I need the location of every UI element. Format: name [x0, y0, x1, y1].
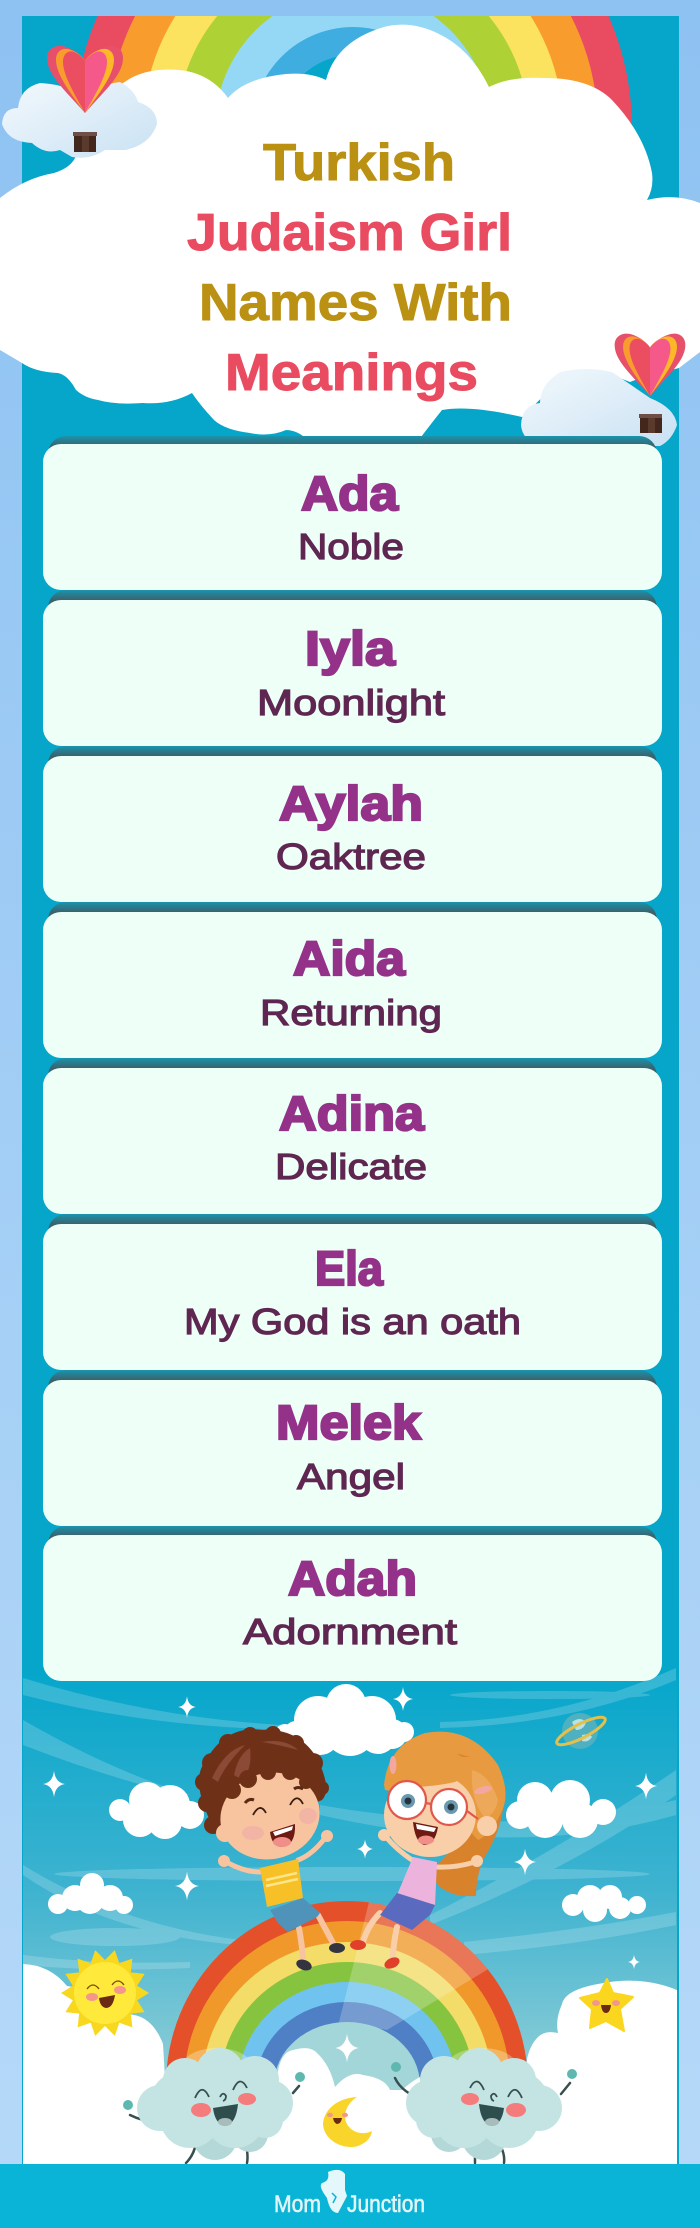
card: Melek: Melek [276, 1397, 421, 1450]
right small cloud [521, 369, 677, 446]
boy shirt [260, 1859, 303, 1907]
card: Aylah [43, 746, 662, 902]
girl eyes [401, 1794, 458, 1814]
card: Adina: Delicate [275, 1146, 427, 1187]
arch sparkle [335, 2034, 359, 2062]
cloud body [137, 2048, 293, 2160]
footer bar [0, 2164, 700, 2228]
card: Ada: Noble [298, 526, 404, 567]
sky [23, 1670, 677, 2165]
girl skirt [380, 1893, 435, 1930]
card: Melek: Angel [297, 1456, 405, 1497]
title: Names With [199, 274, 512, 332]
card: Ada: Ada [301, 468, 398, 521]
left balloon [47, 46, 123, 152]
boy hair highlights [212, 1741, 298, 1782]
title [187, 134, 512, 402]
card: Adah: Adah [288, 1553, 417, 1606]
sky streaks [23, 1668, 676, 1969]
girl shoes [350, 1940, 401, 1971]
right cloud character [391, 2048, 577, 2163]
card: Adina [43, 1058, 662, 1214]
card: Aida: Aida [293, 933, 405, 986]
left cloud face [191, 2081, 256, 2126]
boy limbs [228, 1838, 333, 1958]
card: Adah [43, 1526, 662, 1681]
big rainbow [166, 1901, 526, 2090]
card: Iyla [43, 590, 662, 746]
boy ear [216, 1824, 234, 1842]
card: Ela: My God is an oath [184, 1301, 521, 1342]
planet [554, 1713, 608, 1749]
girl face [384, 1773, 476, 1857]
moon [323, 2097, 372, 2147]
left cloud character [123, 2048, 305, 2163]
card: Aida: Returning [260, 992, 442, 1033]
left small cloud [2, 82, 157, 158]
card: Aylah: Oaktree [276, 836, 426, 877]
boy features [253, 1798, 303, 1815]
girl ear [477, 1816, 497, 1836]
clouds under rainbow [23, 2048, 677, 2164]
right cloud face [461, 2081, 526, 2126]
card: Ela [43, 1214, 662, 1370]
title: Turkish [263, 134, 455, 192]
card: Adah: Adornment [243, 1611, 457, 1652]
boy shoes [295, 1943, 345, 1972]
logo wordmark: Junction [347, 2191, 425, 2218]
right balloon [615, 334, 685, 396]
girl fringe [385, 1744, 472, 1787]
ground clouds [23, 1964, 677, 2164]
card: Aylah: Aylah [279, 778, 423, 831]
girl hands [378, 1829, 483, 1867]
logo icon [321, 2170, 347, 2213]
title cloud [0, 25, 700, 445]
girl [350, 1732, 506, 1971]
header illustration [0, 0, 700, 446]
boy hair [195, 1726, 329, 1838]
boy shorts [270, 1898, 320, 1932]
boy cheeks [242, 1808, 317, 1840]
title: Meanings [225, 344, 478, 402]
footer logo [274, 2170, 425, 2218]
girl glasses [388, 1781, 478, 1825]
right balloon basket [639, 414, 662, 433]
cloud hands [123, 2072, 305, 2110]
card: Ada [43, 436, 662, 590]
header rainbow [83, 16, 632, 125]
sun [61, 1950, 149, 2036]
cloud limbs [395, 2078, 570, 2163]
card: Adina: Adina [279, 1088, 424, 1141]
sky clouds [48, 1684, 646, 1922]
girl hair clips [390, 1756, 493, 1796]
girl hair shading [472, 1770, 498, 1818]
boy hairline [223, 1764, 313, 1799]
cloud legs and arms [130, 2086, 299, 2163]
logo wordmark [274, 2191, 425, 2218]
card: Iyla: Moonlight [257, 682, 445, 723]
boy hands [218, 1830, 333, 1867]
sparkles [43, 1687, 657, 1969]
card: Iyla: Iyla [305, 623, 395, 676]
star character [580, 1979, 633, 2031]
girl limbs [363, 1837, 475, 1958]
boy [195, 1726, 345, 1972]
title: Judaism Girl [187, 204, 512, 262]
card: Melek [43, 1370, 662, 1526]
cloud translucent lobe [181, 2048, 253, 2088]
bottom illustration [23, 1668, 677, 2164]
cloud hands [391, 2062, 577, 2079]
girl long hair [432, 1800, 504, 1896]
card: Aida [43, 902, 662, 1058]
cloud body [406, 2048, 562, 2160]
girl top [397, 1857, 437, 1905]
card: Ela: Ela [315, 1243, 383, 1296]
girl mouth [413, 1822, 438, 1845]
cloud translucent lobe [446, 2048, 518, 2088]
logo wordmark: Mom [274, 2191, 321, 2218]
panel: name cards [43, 436, 662, 1681]
boy face [211, 1762, 329, 1870]
girl hair [384, 1732, 506, 1840]
